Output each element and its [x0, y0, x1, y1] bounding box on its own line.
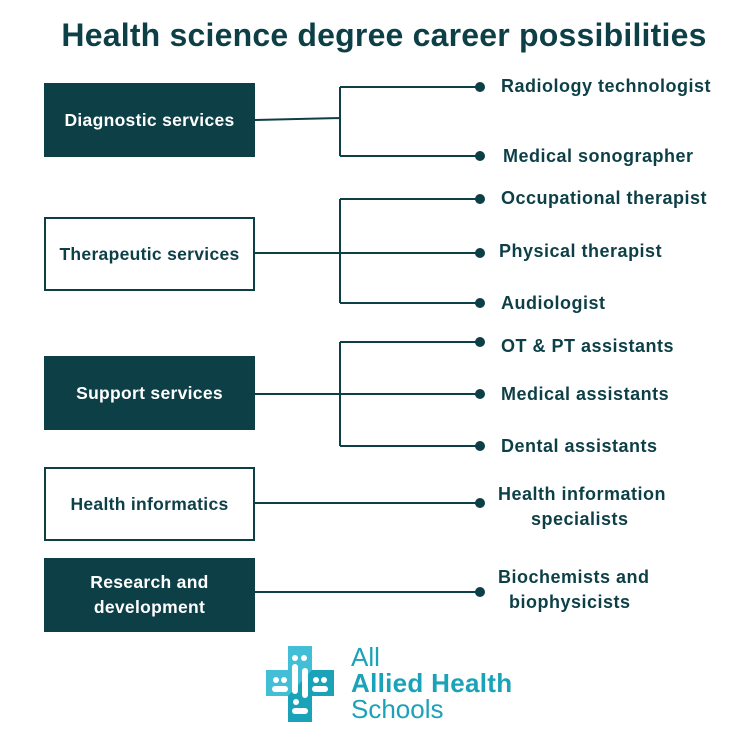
- box: diagnostic: Diagnostic services: [64, 110, 235, 130]
- box: informatics: Health informatics: [70, 494, 229, 514]
- label: Health information: [498, 484, 666, 504]
- box: research: development: [94, 597, 205, 617]
- box: research: Research and: [90, 572, 209, 592]
- logo: [266, 642, 512, 724]
- label: Physical therapist: [499, 241, 662, 261]
- label: Medical sonographer: [503, 146, 694, 166]
- box: diagnostic: [44, 83, 255, 157]
- label: [498, 484, 666, 529]
- box: support: Support services: [76, 382, 223, 402]
- label: Biochemists and: [498, 567, 650, 587]
- logo text: Allied Health: [351, 668, 512, 698]
- label: Audiologist: [501, 293, 605, 313]
- logo text: [351, 642, 512, 724]
- logo text: All: [351, 642, 380, 672]
- box: therapeutic: Therapeutic services: [59, 244, 240, 264]
- label: specialists: [531, 509, 629, 529]
- logo text: Schools: [351, 694, 444, 724]
- label: [498, 567, 650, 612]
- icon: cross: [266, 646, 334, 722]
- box: support: [44, 356, 255, 430]
- box: informatics: [44, 467, 255, 541]
- label: Occupational therapist: [501, 188, 707, 208]
- title: Health science degree career possibilities: [61, 17, 707, 53]
- box: therapeutic: [44, 217, 255, 291]
- label: Radiology technologist: [501, 76, 711, 96]
- label: OT & PT assistants: [501, 336, 674, 356]
- box: research: [44, 558, 255, 632]
- label: biophysicists: [509, 592, 631, 612]
- label: Medical assistants: [501, 384, 669, 404]
- label: Dental assistants: [501, 436, 658, 456]
